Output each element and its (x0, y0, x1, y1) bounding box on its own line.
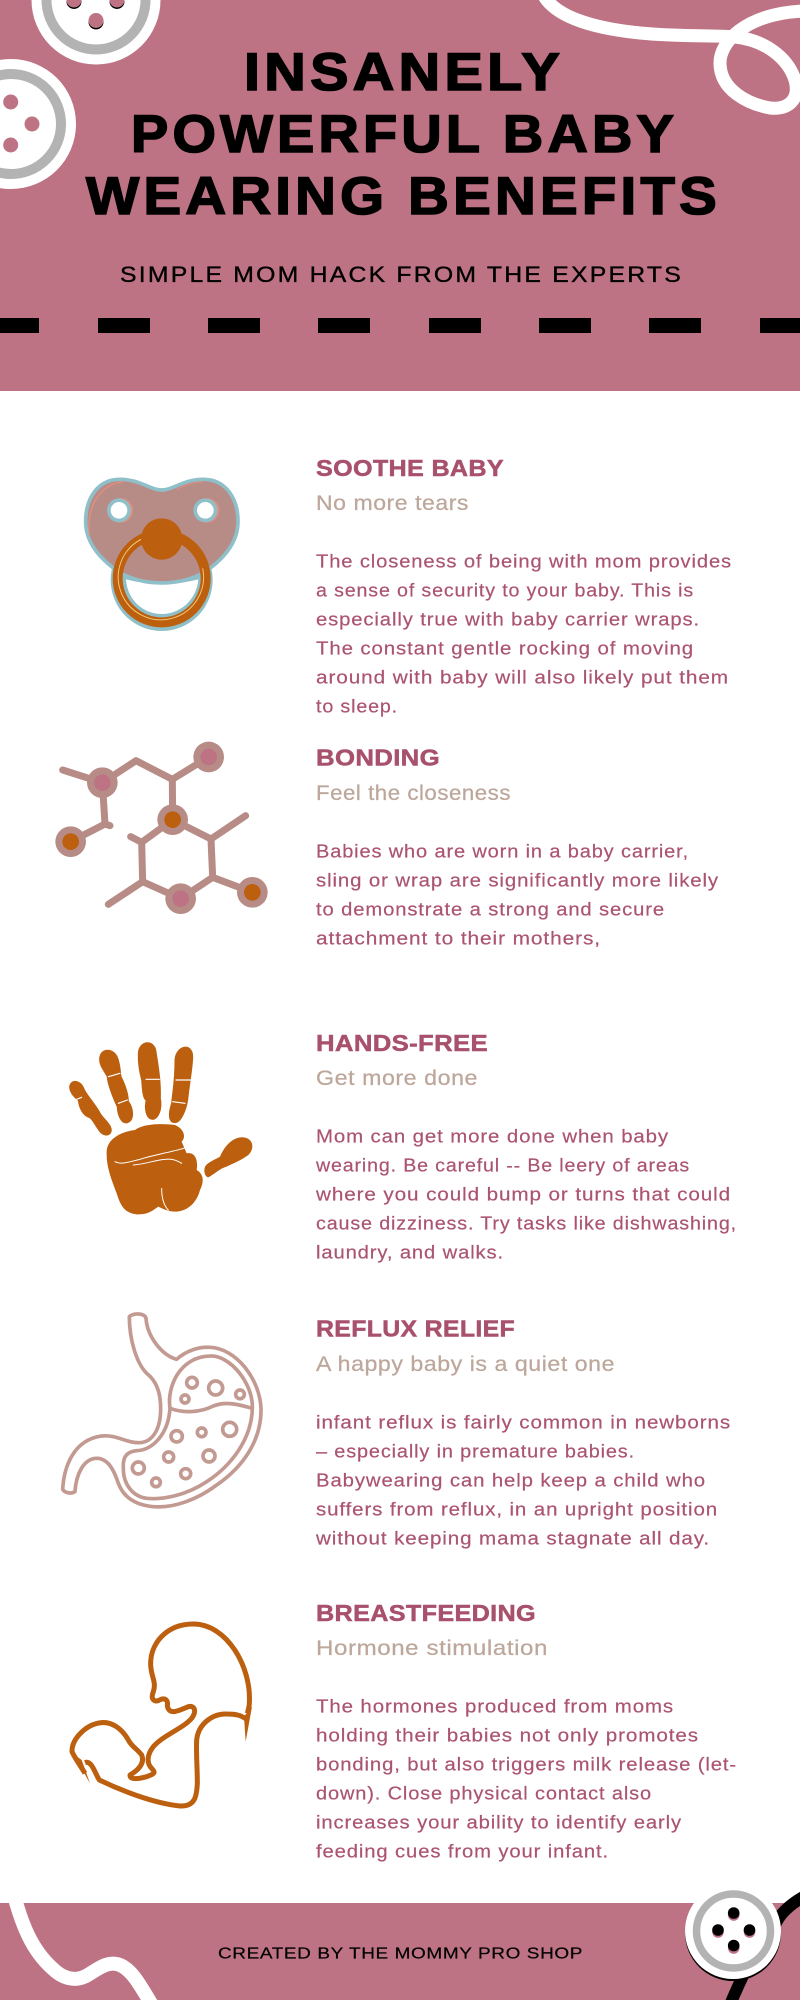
dashed stitch divider (0, 318, 800, 333)
panel: reflux relief (63, 1314, 731, 1548)
heading: REFLUX RELIEF (316, 1316, 515, 1342)
body text: down). Close physical contact also (316, 1782, 652, 1803)
subheading: Feel the closeness (316, 782, 511, 805)
icon: left button (0, 59, 76, 189)
body text: laundry, and walks. (316, 1241, 504, 1262)
body text: infant reflux is fairly common in newborns (316, 1411, 731, 1432)
icon: top button (32, 0, 160, 64)
subheading: Hormone stimulation (316, 1637, 548, 1660)
body text: feeding cues from your infant. (316, 1840, 609, 1861)
icon: pacifier (86, 479, 238, 631)
heading: BREASTFEEDING (316, 1600, 536, 1626)
icon: stomach (63, 1314, 261, 1507)
panel: bonding (55, 742, 719, 948)
icon: white thread (14, 1895, 152, 2000)
body text: especially true with baby carrier wraps. (316, 608, 700, 630)
body text (316, 1695, 737, 1861)
subheading: No more tears (316, 492, 469, 515)
footer credit: CREATED BY THE MOMMY PRO SHOP (218, 1945, 583, 1962)
title: POWERFUL BABY (131, 105, 678, 164)
icon: white thread (544, 0, 800, 108)
heading: BONDING (316, 745, 440, 771)
body text: Babywearing can help keep a child who (316, 1469, 706, 1490)
subheading: Get more done (316, 1067, 478, 1090)
panel: footer (0, 1883, 800, 2000)
icon detail: hand cusp (73, 1754, 90, 1783)
body text: around with baby will also likely put them (316, 666, 729, 688)
body text (315, 1411, 731, 1548)
icon: handprint (71, 1044, 252, 1214)
body text: The closeness of being with mom provides (316, 550, 732, 572)
panel: hands-free (71, 1030, 737, 1262)
heading: SOOTHE BABY (316, 455, 504, 481)
body text: wearing. Be careful -- Be leery of areas (315, 1154, 690, 1175)
icon: footer button (685, 1883, 781, 1981)
body text: attachment to their mothers, (316, 927, 601, 948)
title (86, 43, 721, 226)
body text: Mom can get more done when baby (316, 1125, 669, 1146)
body text: increases your ability to identify early (316, 1811, 682, 1832)
body text: holding their babies not only promotes (316, 1724, 699, 1745)
panel: header (0, 0, 800, 391)
body text: cause dizziness. Try tasks like dishwashing, (316, 1212, 737, 1233)
subtitle: SIMPLE MOM HACK FROM THE EXPERTS (120, 262, 683, 287)
body text: The constant gentle rocking of moving (316, 638, 694, 658)
panel: soothe baby (86, 455, 732, 716)
body text: Babies who are worn in a baby carrier, (316, 840, 689, 861)
icon: black thread (730, 1897, 800, 2000)
body text: bonding, but also triggers milk release (let- (316, 1753, 737, 1774)
title: WEARING BENEFITS (86, 167, 721, 226)
body text: suffers from reflux, in an upright position (316, 1498, 718, 1519)
body text: – especially in premature babies. (316, 1440, 635, 1461)
body text (316, 840, 719, 948)
body text: where you could bump or turns that could (315, 1183, 731, 1204)
subheading: A happy baby is a quiet one (316, 1353, 615, 1376)
title: INSANELY (244, 43, 564, 102)
body text: a sense of security to your baby. This is (316, 580, 694, 600)
icon detail: hair cusp (244, 1707, 252, 1742)
icon: molecule (55, 742, 268, 914)
body text: sling or wrap are significantly more likely (316, 869, 719, 890)
body text (315, 1125, 737, 1262)
body text: without keeping mama stagnate all day. (315, 1527, 710, 1548)
icon: mother and baby outline (72, 1624, 252, 1806)
body text (316, 550, 732, 716)
body text: to demonstrate a strong and secure (316, 898, 665, 919)
body text: to sleep. (316, 696, 398, 716)
panel: breastfeeding (72, 1600, 737, 1861)
body text: The hormones produced from moms (316, 1695, 674, 1716)
heading: HANDS-FREE (316, 1030, 488, 1056)
